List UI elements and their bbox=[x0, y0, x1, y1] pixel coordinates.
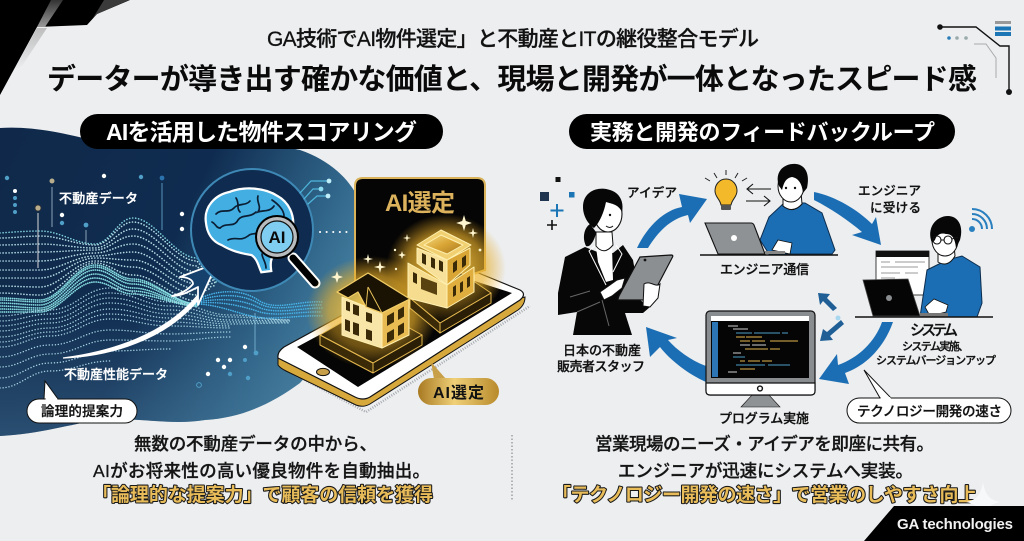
panel: AI property scoring bbox=[0, 114, 530, 436]
arrow: to system engineer bbox=[814, 192, 881, 245]
phone body bbox=[278, 261, 525, 406]
chart: upper dotted data wave bbox=[0, 218, 217, 301]
chart: bright wave band bbox=[0, 265, 197, 312]
icon: light bulb bbox=[705, 170, 747, 210]
title: subtitle line: GA技術でAI物件選定」と不動産とITの継役整合モデル bbox=[267, 27, 759, 51]
label: received by engineer: エンジニア bbox=[858, 184, 921, 198]
phone shadow bbox=[282, 306, 530, 412]
label: program implementation: プログラム実施 bbox=[719, 411, 809, 426]
corner decoration: top left bbox=[0, 0, 130, 95]
label: sales staff bbox=[557, 343, 645, 374]
label: sales staff: 日本の不動産 bbox=[563, 343, 641, 358]
callout: technology development speed: テクノロジー開発の速さ bbox=[857, 404, 1002, 419]
icons: small decorations bbox=[540, 177, 574, 230]
arrow: idea to engineer bbox=[637, 194, 707, 248]
label: received by engineer bbox=[858, 184, 921, 215]
text block: right description: 「テクノロジー開発の速さ」で営業のしやすさ向上 bbox=[552, 484, 977, 506]
label: system bbox=[876, 322, 996, 367]
arrow: program to sales staff bbox=[646, 327, 706, 382]
AI selection card bbox=[355, 178, 485, 300]
illustration: smartphone with golden houses bbox=[278, 178, 530, 412]
callout: AI selection gold pill: AI選定 bbox=[433, 384, 484, 402]
callout: logical proposal power: 論理的提案力 bbox=[41, 404, 123, 419]
text block: left description: 「論理的な提案力」で顧客の信頼を獲得 bbox=[92, 484, 433, 506]
arrows: small two-way bbox=[818, 293, 844, 341]
label: engineer communication: エンジニア通信 bbox=[720, 262, 809, 277]
text block: right description bbox=[552, 434, 977, 506]
figure: engineer at laptop bbox=[700, 164, 838, 255]
arrows: exchange bbox=[746, 184, 771, 206]
icon: monitor with code bbox=[706, 311, 815, 407]
icon: golden house bbox=[320, 273, 422, 373]
background blob bbox=[0, 128, 372, 436]
label: system: システムバージョンアップ bbox=[876, 354, 996, 367]
label: system: システム bbox=[910, 322, 958, 339]
panel: feedback loop bbox=[540, 114, 1011, 426]
chart: lower dotted data wave bbox=[0, 288, 290, 388]
label: system: システム実施、 bbox=[902, 339, 969, 353]
icon: AI brain with magnifying glass bbox=[191, 169, 353, 291]
golden glow bbox=[306, 256, 438, 368]
title: main heading: データーが導き出す確かな価値と、現場と開発が一体となったスピード感 bbox=[47, 62, 977, 96]
text block: right description: 営業現場のニーズ・アイデアを即座に共有。 bbox=[595, 434, 934, 454]
text block: right description: エンジニアが迅速にシステムへ実装。 bbox=[618, 461, 913, 481]
label: idea: アイデア bbox=[627, 185, 677, 200]
icon: wifi bbox=[969, 209, 992, 232]
footer brand: GA technologies bbox=[864, 506, 1024, 541]
label: received by engineer: に受ける bbox=[870, 200, 921, 215]
icon: golden building bbox=[408, 230, 491, 333]
figure: system engineer bbox=[855, 216, 993, 317]
heading pill: AI scoring bbox=[80, 114, 443, 149]
arrow: rising trend bbox=[63, 263, 217, 358]
data point lines and dots bbox=[5, 174, 258, 387]
icon: sparkle watermark bbox=[966, 482, 1000, 517]
figure: real estate sales staff bbox=[558, 189, 673, 335]
heading pill: feedback loop bbox=[569, 114, 955, 149]
heading pill: feedback loop: 実務と開発のフィードバックループ bbox=[590, 120, 935, 145]
label: sales staff: 販売者スタッフ bbox=[557, 359, 645, 374]
text block: left description: AIがお将来性の高い優良物件を自動抽出。 bbox=[93, 461, 430, 481]
heading pill: AI scoring: AIを活用した物件スコアリング bbox=[106, 119, 417, 145]
callout: technology development speed bbox=[847, 370, 1011, 423]
AI selection card: AI選定 bbox=[385, 190, 455, 217]
arrow: system to program bbox=[819, 322, 893, 384]
icon: AI brain with magnifying glass: AI bbox=[268, 228, 286, 247]
footer brand: GA technologies: GA technologies bbox=[897, 516, 1013, 533]
corner decoration: circuit lines top right bbox=[937, 21, 1012, 95]
label: real estate data: 不動産データ bbox=[59, 191, 138, 206]
icons: sparkles bbox=[331, 215, 481, 283]
chart: blue wave band bbox=[197, 292, 322, 318]
text block: left description bbox=[92, 434, 433, 506]
divider bbox=[511, 435, 513, 500]
callout: AI selection gold pill bbox=[418, 362, 499, 405]
text block: left description: 無数の不動産データの中から、 bbox=[134, 434, 377, 454]
callout: logical proposal power bbox=[27, 381, 137, 423]
label: real estate performance data: 不動産性能データ bbox=[64, 367, 168, 382]
